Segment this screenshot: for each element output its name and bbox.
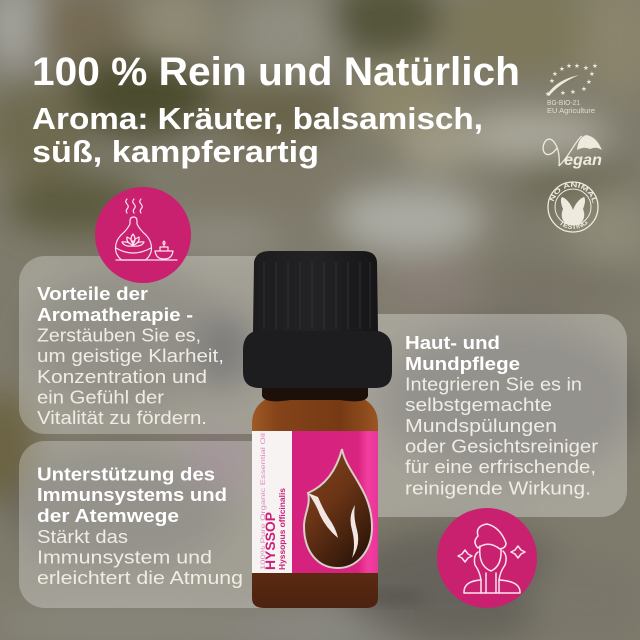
icon: aroma diffuser circle [95,187,191,283]
bottle [243,251,425,608]
subtitle: aroma: Aroma: Kräuter, balsamisch, [32,101,483,136]
cap collar [243,331,392,388]
icon: EU organic leaf: ★ [552,70,558,78]
text: immune and respiratory support: Stärkt das [37,526,128,547]
label text: 100% Pure Organic Essential Oil [260,432,267,570]
text: immune and respiratory support: erleichtert die Atmung [37,567,243,588]
bottle neck [262,386,368,401]
drop emblem [304,449,372,568]
bottle glass lower body [252,570,378,608]
icon: no animal testing: TESTING [560,220,588,229]
cap ribs [264,262,370,329]
icon: vegan logo: egan [564,152,602,169]
title: 100 % Rein und Natürlich [32,50,520,94]
icon: EU organic leaf: ★ [589,70,595,78]
text: skin and oral care: Mundspülungen [405,415,557,436]
text: skin and oral care: selbstgemachte [405,394,552,415]
text: skin and oral care: für eine erfrischende, [405,456,596,477]
panel: aromatherapy benefits [19,256,299,434]
icon: EU organic leaf: ★ [570,88,576,96]
text: skin and oral care: reinigende Wirkung. [405,478,591,498]
text: skin and oral care: Integrieren Sie es in [405,374,582,394]
icon: EU organic leaf: ★ [560,89,566,97]
text: aromatherapy benefits: Konzentration und [37,366,207,387]
label text: Hyssopus officinalis [277,488,287,570]
bottle shadow [365,589,425,605]
icon: EU organic leaf [545,62,598,115]
text: skin and oral care: Mundpflege [405,353,520,374]
bottle cap [253,251,378,332]
text: aromatherapy benefits: um geistige Klarheit, [37,345,224,366]
text: aromatherapy benefits [37,283,224,428]
text: aromatherapy benefits: Vitalität zu fördern. [37,407,207,428]
icon: EU organic leaf: ★ [559,65,565,73]
text: skin and oral care [405,332,598,498]
text: immune and respiratory support: Immunsystem und [37,546,212,568]
icon: no animal testing [547,181,599,233]
icon: vegan logo [543,135,602,169]
icon: EU organic leaf: EU Agriculture [547,106,595,115]
icon: EU organic leaf: ★ [583,64,589,72]
text: immune and respiratory support [37,464,243,588]
text: immune and respiratory support: Unterstützung des [37,464,215,484]
icon: EU organic leaf: ★ [574,62,580,70]
text: aromatherapy benefits: Vorteile der [37,283,148,304]
label text: HYSSOP [262,512,278,570]
icon: EU organic leaf: ★ [592,62,598,70]
text: aromatherapy benefits: Zerstäuben Sie es, [37,324,201,346]
text: skin and oral care: Haut- und [405,332,500,353]
icon: EU organic leaf: BG-BIO-21 [547,98,580,107]
text: aromatherapy benefits: Aromatherapie - [37,304,193,325]
product label [252,431,378,573]
icon: EU organic leaf: ★ [581,85,587,93]
panel: immune and respiratory support [19,441,299,608]
text: immune and respiratory support: der Atemwege [37,505,179,526]
text: skin and oral care: oder Gesichtsreiniger [405,436,598,456]
subtitle: aroma: süß, kampferartig [32,134,319,169]
icon: EU organic leaf: ★ [566,62,572,70]
icon: face care circle [437,508,537,608]
label text [260,432,287,570]
icon: no animal testing: NO ANIMAL [550,182,596,204]
icon: EU organic leaf: ★ [549,77,555,85]
bottle glass upper body [252,398,378,440]
panel: skin and oral care [340,314,627,517]
text: immune and respiratory support: Immunsystems und [37,484,227,505]
icon: EU organic leaf: ★ [586,78,592,86]
subtitle: aroma [32,101,483,169]
text: aromatherapy benefits: ein Gefühl der [37,386,164,408]
icon: EU organic leaf: ★ [545,90,551,98]
